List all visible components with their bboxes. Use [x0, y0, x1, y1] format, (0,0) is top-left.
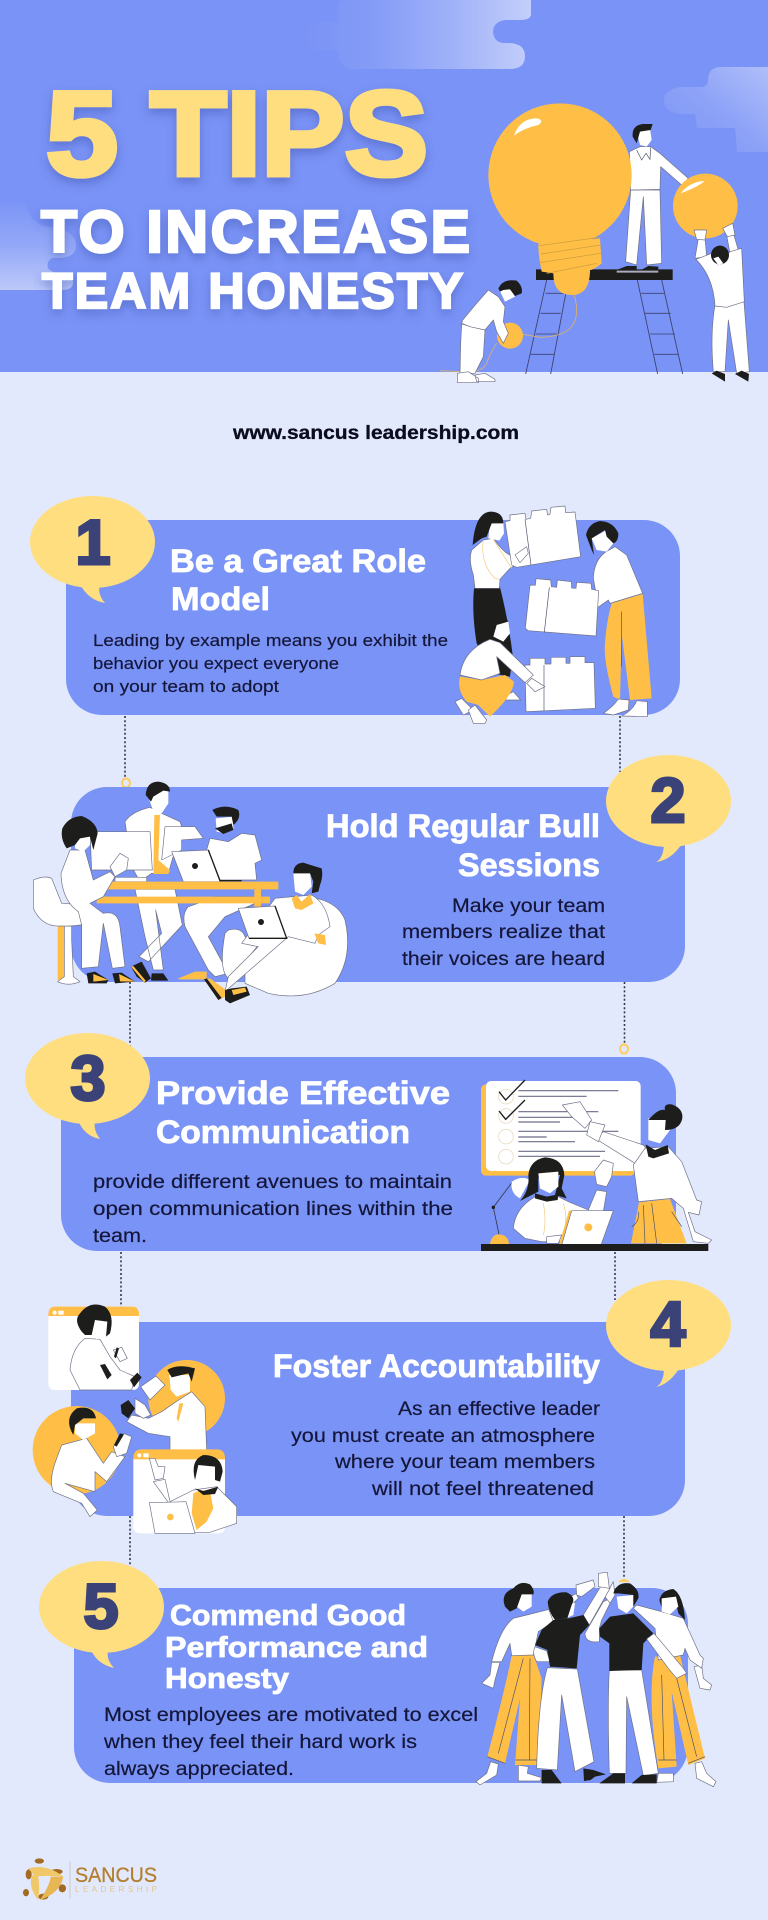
cloud: right [664, 67, 768, 152]
logo: Sancus Leadership [23, 1858, 157, 1900]
speech bubble number 5: 5 [83, 1572, 119, 1642]
cloud: top [304, 0, 531, 69]
body text tip 2 [402, 896, 606, 970]
crouching woman [455, 613, 545, 723]
logo tagline: LEADERSHIP [75, 1885, 157, 1894]
heading tip 5: Performance and [165, 1632, 428, 1664]
heading tip 2: Sessions [458, 847, 600, 883]
panel background [74, 1588, 688, 1783]
body text tip 2: their voices are heard [402, 949, 605, 970]
video window bottom with woman [133, 1449, 237, 1533]
body text tip 1: Leading by example means you exhibit the [93, 631, 448, 650]
body text tip 5: Most employees are motivated to excel [104, 1705, 478, 1726]
panel: tip 2 [33, 755, 731, 1003]
body text tip 1 [93, 631, 448, 696]
person C black top [585, 1582, 687, 1783]
illustration: team high five [476, 1572, 716, 1787]
person B black top [534, 1572, 610, 1783]
title [41, 67, 470, 319]
block top [505, 506, 581, 567]
speech bubble number 5 [39, 1561, 164, 1668]
desk [481, 1244, 708, 1251]
speech bubble number 4: 4 [650, 1290, 686, 1360]
standing man on platform [617, 124, 688, 273]
website url: www.sancus leadership.com [232, 423, 519, 444]
icon: wheat triangle emblem [23, 1858, 66, 1900]
title line: 5 TIPS: 5 [46, 67, 118, 201]
speech bubble number 2 [606, 755, 731, 862]
illustration: team lifting light bulb [440, 103, 749, 383]
illustration: presenting checklist [481, 1080, 712, 1251]
block middle [525, 579, 599, 636]
speech bubble number 4 [606, 1280, 731, 1387]
monitor [90, 832, 152, 882]
body text tip 4: As an effective leader [398, 1399, 601, 1420]
icon: small light bulb [673, 174, 738, 238]
body text tip 1: behavior you expect everyone [93, 654, 339, 673]
heading tip 2: Hold Regular Bull [326, 808, 600, 844]
speech bubble number 2: 2 [650, 766, 686, 836]
body text tip 5: always appreciated. [104, 1759, 294, 1780]
illustration: team with blocks [455, 506, 652, 723]
video window top with woman [48, 1304, 142, 1390]
standing man [125, 782, 182, 983]
logo wordmark: SANCUS [75, 1864, 157, 1887]
cloud: left [0, 203, 76, 290]
speech bubble number 3: 3 [70, 1044, 106, 1114]
body text tip 3: team. [93, 1226, 147, 1247]
panel: tip 4 [33, 1280, 731, 1533]
woman presenting [562, 1102, 712, 1243]
woman on bean bag [204, 863, 348, 1003]
body text tip 1: on your team to adopt [93, 677, 279, 696]
standing person orange trousers [584, 521, 652, 717]
heading tip 2 [326, 808, 600, 883]
heading tip 4: Foster Accountability [273, 1348, 600, 1384]
body text tip 2: Make your team [452, 896, 605, 917]
table [93, 882, 278, 907]
circle avatar left with man [33, 1406, 132, 1517]
illustration: team meeting at table [33, 782, 348, 1003]
speech bubble number 1 [30, 496, 155, 603]
panel background [71, 787, 685, 982]
body text tip 2: members realize that [402, 922, 606, 943]
panel: tip 1 [30, 496, 680, 723]
laptop on table [172, 850, 242, 882]
heading tip 3 [156, 1075, 450, 1150]
heading tip 1: Be a Great Role [170, 543, 426, 579]
panel: tip 5 [39, 1561, 716, 1787]
body text tip 4 [291, 1399, 601, 1500]
seated woman [513, 1157, 613, 1245]
illustration: people communicating on devices [33, 1304, 237, 1533]
heading tip 5 [165, 1600, 428, 1695]
icon: ladders [526, 280, 683, 374]
person D orange trousers [633, 1589, 716, 1787]
heading tip 1: Model [171, 581, 270, 617]
title line: 5 TIPS: TIPS [150, 67, 428, 201]
header banner [0, 0, 768, 372]
icon: big light bulb [440, 103, 632, 372]
body text tip 5: when they feel their hard work is [103, 1732, 417, 1753]
body text tip 3: open communication lines within the [93, 1199, 453, 1220]
body text tip 4: you must create an atmosphere [291, 1426, 595, 1447]
heading tip 5: Honesty [165, 1663, 289, 1695]
standing woman with block [470, 512, 527, 677]
panel background [71, 1322, 685, 1516]
checklist board [481, 1080, 641, 1176]
body text tip 4: where your team members [334, 1452, 595, 1473]
block bottom [525, 657, 595, 712]
title line: team honesty: TEAM HONESTY [42, 263, 463, 319]
heading tip 3: Provide Effective [156, 1075, 450, 1111]
chair [33, 877, 97, 984]
man holding small bulb [694, 223, 749, 382]
panel: tip 3 [25, 1033, 712, 1251]
panel background [66, 520, 680, 715]
lamp [490, 1178, 530, 1244]
body text tip 4: will not feel threatened [371, 1479, 594, 1500]
person A orange trousers [476, 1580, 595, 1785]
body text tip 3 [93, 1172, 453, 1247]
heading tip 5: Commend Good [170, 1600, 406, 1632]
bearded man [178, 807, 262, 979]
speech bubble number 3 [25, 1033, 150, 1139]
connectors between tips [121, 716, 630, 1582]
icon: platform [536, 269, 673, 280]
heading tip 1 [170, 543, 426, 617]
body text tip 5 [103, 1705, 478, 1780]
man bending with small bulb [457, 280, 523, 383]
panel background [61, 1057, 676, 1251]
paper menu [162, 827, 203, 860]
body text tip 3: provide different avenues to maintain [93, 1172, 452, 1193]
woman at monitor [61, 816, 135, 983]
title line: to increase: TO INCREASE [41, 199, 470, 265]
heading tip 3: Communication [156, 1114, 410, 1150]
speech bubble number 1: 1 [75, 508, 111, 578]
circle avatar right with man [121, 1360, 225, 1450]
